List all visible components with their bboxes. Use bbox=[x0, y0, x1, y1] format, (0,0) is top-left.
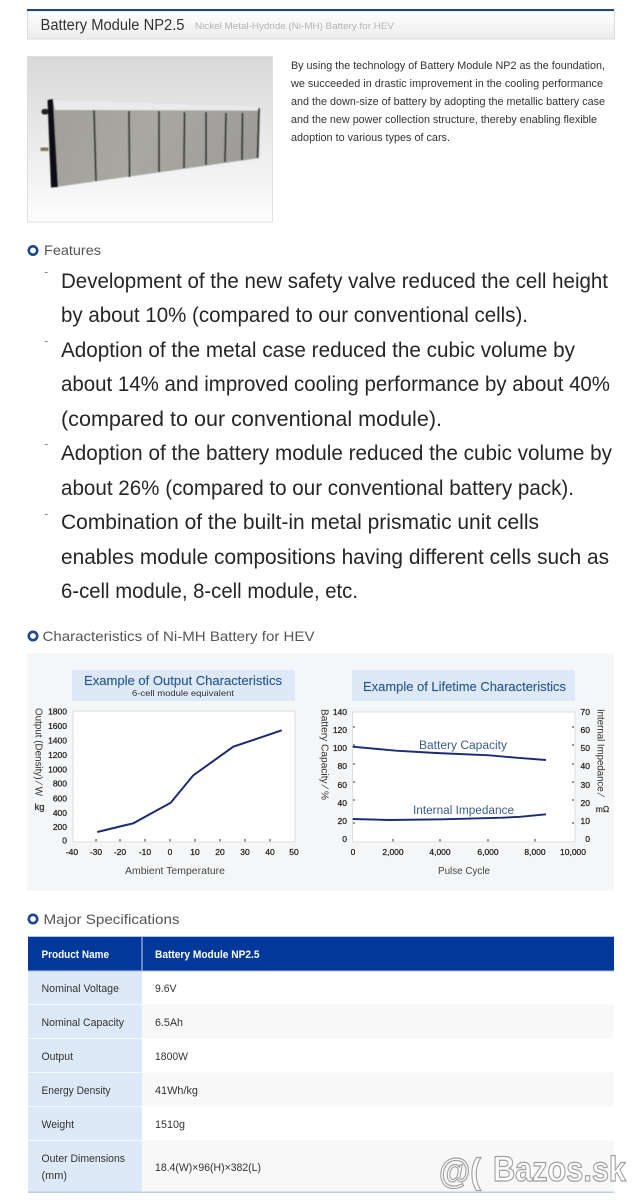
internal impedance curve bbox=[353, 814, 546, 820]
row values: 1510g bbox=[155, 1119, 185, 1131]
x axis labels: -20 bbox=[114, 847, 126, 857]
right axis labels: 50 bbox=[581, 743, 590, 753]
chart: lifetime characteristics bbox=[318, 670, 609, 877]
intro paragraph: and the new power collection structure, thereby enabling flexible bbox=[291, 114, 597, 126]
features list bbox=[45, 270, 612, 603]
x axis labels: 10,000 bbox=[560, 847, 586, 857]
heading: Major Specifications: Major Specifications bbox=[44, 911, 180, 927]
chart title: Example of Lifetime Characteristics bbox=[363, 680, 566, 694]
y axis title: Output (Density) ∕ W bbox=[32, 708, 44, 796]
specifications table bbox=[28, 936, 614, 1193]
chart title bbox=[72, 670, 295, 701]
row labels: Energy Density bbox=[42, 1085, 111, 1097]
features list: enables module compositions having different cells such as bbox=[61, 546, 609, 569]
left axis labels: 60 bbox=[338, 780, 347, 790]
row values: 18.4(W)×96(H)×382(L) bbox=[155, 1162, 261, 1174]
row values: 1800W bbox=[155, 1051, 189, 1063]
y axis labels: 400 bbox=[53, 808, 67, 818]
header band bbox=[27, 9, 614, 39]
left axis title: Battery Capacity ∕ % bbox=[318, 709, 330, 800]
features list: Adoption of the metal case reduced the cubic volume by bbox=[61, 339, 575, 362]
x axis labels bbox=[66, 847, 299, 857]
y axis labels: 600 bbox=[53, 794, 67, 804]
features list: 6-cell module, 8-cell module, etc. bbox=[61, 580, 358, 603]
row labels: Output bbox=[42, 1051, 73, 1063]
row labels: Nominal Voltage bbox=[42, 983, 119, 995]
y axis labels: 1400 bbox=[48, 736, 67, 746]
intro paragraph bbox=[290, 60, 605, 144]
intro paragraph: we succeeded in drastic improvement in the cooling performance bbox=[290, 78, 603, 90]
battery capacity curve bbox=[353, 747, 546, 760]
subtitle: Nickel Metal-Hydride (Ni-MH) Battery for HEV bbox=[195, 21, 394, 31]
right axis labels: 10 bbox=[581, 816, 590, 826]
left axis labels: 40 bbox=[338, 798, 347, 808]
row values bbox=[155, 983, 261, 1174]
row values: 41Wh/kg bbox=[155, 1085, 198, 1097]
heading: Features: Features bbox=[44, 242, 101, 258]
y axis labels: 1800 bbox=[48, 706, 67, 716]
intro paragraph: By using the technology of Battery Module NP2 as the foundation, bbox=[291, 60, 605, 72]
left axis labels: 140 bbox=[333, 707, 347, 717]
chart title bbox=[352, 670, 575, 701]
features list: about 26% (compared to our conventional battery pack). bbox=[61, 477, 574, 500]
row labels: Nominal Capacity bbox=[42, 1017, 124, 1029]
right axis labels: 60 bbox=[581, 725, 590, 735]
row labels: Outer Dimensions bbox=[42, 1153, 125, 1165]
watermark: @( bbox=[439, 1152, 481, 1191]
left axis labels: 20 bbox=[338, 816, 347, 826]
label: battery capacity: Battery Capacity bbox=[419, 740, 507, 752]
y axis labels bbox=[48, 706, 67, 846]
x axis labels bbox=[351, 847, 586, 857]
output curve bbox=[97, 730, 282, 832]
x axis labels: -40 bbox=[66, 847, 78, 857]
row labels: (mm) bbox=[42, 1170, 67, 1182]
x axis labels: 6,000 bbox=[477, 847, 499, 857]
right axis labels: 20 bbox=[581, 798, 590, 808]
x axis labels: 4,000 bbox=[429, 847, 451, 857]
y axis labels: 1200 bbox=[48, 750, 67, 760]
x axis labels: 40 bbox=[265, 847, 275, 857]
product photo: battery module bbox=[28, 56, 272, 222]
table header row bbox=[28, 937, 614, 970]
row labels: Weight bbox=[42, 1119, 74, 1131]
label: internal impedance: Internal Impedance bbox=[413, 805, 514, 817]
y axis labels: 1000 bbox=[48, 764, 67, 774]
features list: (compared to our conventional module). bbox=[61, 408, 442, 431]
heading: Characteristics: Characteristics of Ni-MH Battery for HEV bbox=[42, 628, 315, 644]
left axis labels: 0 bbox=[342, 834, 347, 844]
x axis labels: 10 bbox=[190, 847, 200, 857]
x axis labels: -30 bbox=[90, 847, 102, 857]
left axis labels: 100 bbox=[333, 743, 347, 753]
x axis labels: 20 bbox=[215, 847, 225, 857]
x axis labels: 2,000 bbox=[382, 847, 404, 857]
y axis labels: 800 bbox=[53, 778, 67, 788]
features list: about 14% and improved cooling performance by about 40% bbox=[61, 373, 610, 396]
chart title: 6-cell module equivalent bbox=[132, 688, 235, 698]
features list: Adoption of the battery module reduced the cubic volume by bbox=[61, 442, 612, 465]
x axis labels: 0 bbox=[168, 847, 173, 857]
right axis labels bbox=[581, 707, 590, 844]
x axis labels: -10 bbox=[139, 847, 151, 857]
right axis title: Internal Impedance ∕ bbox=[594, 709, 606, 798]
title: Battery Module NP2.5 bbox=[40, 17, 184, 34]
left axis labels bbox=[333, 707, 347, 844]
y axis labels: 1600 bbox=[48, 721, 67, 731]
intro paragraph: and the down-size of battery by adopting the metallic battery case bbox=[291, 96, 605, 108]
x axis labels: 8,000 bbox=[524, 847, 546, 857]
chart title: Example of Output Characteristics bbox=[84, 674, 282, 688]
y axis title: kg bbox=[34, 802, 45, 813]
features list: Combination of the built-in metal prismatic unit cells bbox=[61, 511, 539, 534]
y axis labels: 0 bbox=[62, 836, 67, 846]
row labels bbox=[42, 983, 125, 1182]
intro paragraph: adoption to various types of cars. bbox=[291, 132, 450, 144]
watermark bbox=[439, 1150, 626, 1191]
right axis title: mΩ bbox=[596, 804, 609, 814]
row values: 6.5Ah bbox=[155, 1017, 183, 1029]
y axis labels: 200 bbox=[53, 822, 67, 832]
features list: by about 10% (compared to our conventional cells). bbox=[61, 304, 528, 327]
table header row: Battery Module NP2.5 bbox=[155, 949, 260, 961]
features list: Development of the new safety valve reduced the cell height bbox=[61, 270, 608, 293]
right axis labels: 0 bbox=[585, 834, 590, 844]
left axis labels: 80 bbox=[338, 761, 347, 771]
row values: 9.6V bbox=[155, 983, 177, 995]
panel: charts bbox=[27, 653, 614, 891]
x axis labels: 50 bbox=[289, 847, 299, 857]
x axis labels: 30 bbox=[240, 847, 250, 857]
chart: output characteristics bbox=[32, 670, 299, 877]
right axis labels: 40 bbox=[581, 761, 590, 771]
x axis labels: 0 bbox=[351, 847, 356, 857]
right axis labels: 30 bbox=[581, 780, 590, 790]
x axis title: Ambient Temperature bbox=[125, 866, 225, 877]
right axis labels: 70 bbox=[581, 707, 590, 717]
left axis labels: 120 bbox=[333, 725, 347, 735]
table header row: Product Name bbox=[42, 949, 109, 961]
x axis title: Pulse Cycle bbox=[438, 866, 490, 877]
